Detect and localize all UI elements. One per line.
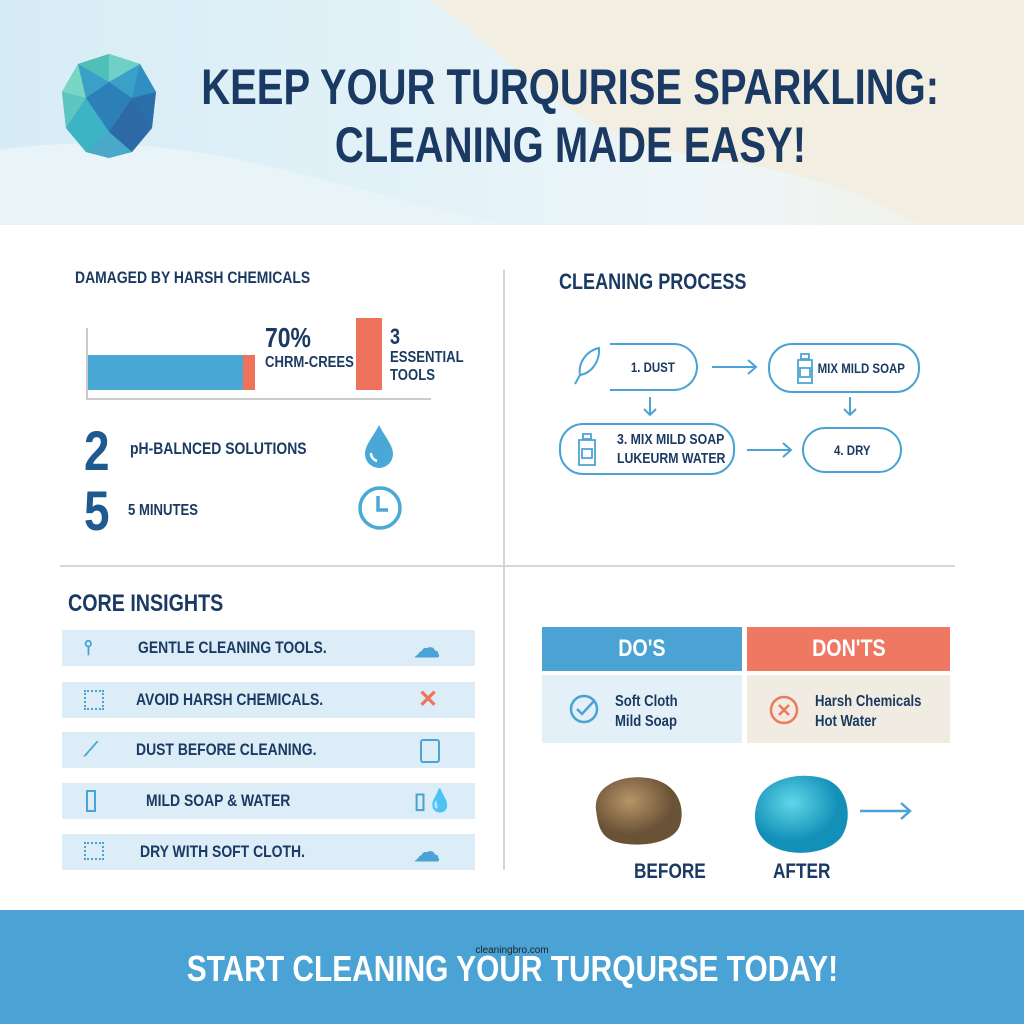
panel: do's and don'ts: DON'TS: [812, 635, 885, 662]
footer: START CLEANING YOUR TURQURSE TODAY!: [186, 948, 838, 989]
row 4: [62, 783, 475, 819]
text: 70%: 70%: [265, 322, 311, 353]
row 1: ⫯: [84, 637, 93, 659]
row 4: MILD SOAP & WATER: [146, 791, 290, 810]
title: KEEP YOUR TURQURISE SPARKLING:: [201, 59, 939, 115]
panel: do's and don'ts: Hot Water: [815, 713, 876, 730]
panel: stats: CHRM-CREES: [265, 354, 354, 371]
panel: stats: [75, 268, 464, 542]
row 5: [62, 834, 475, 870]
panel: do's and don'ts: Mild Soap: [615, 713, 677, 730]
panel: stats: pH-BALNCED SOLUTIONS: [130, 439, 307, 458]
step 1: [610, 343, 698, 391]
label: after: AFTER: [773, 860, 830, 883]
heading: CLEANING PROCESS: [559, 269, 746, 294]
icon: x: [770, 696, 798, 724]
icon: clock: [358, 486, 402, 530]
arrow: [712, 359, 758, 375]
panel: cleaning process: [559, 269, 920, 475]
icon: gem: [62, 54, 156, 158]
stat: 5: 5: [84, 479, 110, 542]
arrow: [747, 442, 792, 458]
row 1: ☁: [414, 633, 440, 663]
icon: check: [570, 694, 598, 724]
row 3: ⟋: [84, 739, 98, 761]
row 2: [62, 682, 475, 718]
heading: DAMAGED BY HARSH CHEMICALS: [75, 268, 310, 287]
row 5: ☁: [414, 837, 440, 867]
footer: cleaningbro.com: [475, 945, 549, 956]
row 1: [62, 630, 475, 666]
panel: do's and don'ts: Soft Cloth: [615, 693, 678, 710]
step 3: 3. MIX MILD SOAP: [617, 431, 724, 448]
header background: [0, 0, 1024, 225]
step 4: 4. DRY: [834, 442, 870, 458]
step 3: LUKEURM WATER: [617, 450, 725, 467]
stat: 2: 2: [84, 419, 110, 482]
row 1: GENTLE CLEANING TOOLS.: [138, 638, 327, 657]
title: CLEANING MADE EASY!: [334, 117, 806, 173]
icon: drop: [365, 425, 393, 468]
bar chart: [86, 328, 431, 400]
before stone: [596, 777, 682, 845]
step 2: MIX MILD SOAP: [817, 360, 905, 376]
label: before: BEFORE: [634, 860, 706, 883]
icon: feather: [574, 346, 600, 384]
step 3: [559, 423, 735, 475]
heading: core insights: CORE INSIGHTS: [68, 590, 223, 617]
row 3: DUST BEFORE CLEANING.: [136, 740, 316, 759]
text: 3 tools: ESSENTIAL: [390, 349, 464, 366]
panel: stats: 5 MINUTES: [128, 502, 198, 519]
title: [201, 59, 939, 173]
text: 3 tools: 3: [390, 324, 400, 349]
row 5: DRY WITH SOFT CLOTH.: [140, 842, 305, 861]
row 2: ✕: [418, 686, 438, 713]
row 2: AVOID HARSH CHEMICALS.: [136, 690, 323, 709]
row 3: [62, 732, 475, 768]
panel: do's and don'ts: Harsh Chemicals: [815, 693, 921, 710]
row 4: ▯💧: [414, 788, 454, 813]
panel: do's and don'ts: [542, 627, 950, 743]
step 1: 1. DUST: [631, 358, 675, 374]
after stone: [754, 776, 848, 853]
arrows down: [643, 397, 657, 416]
footer: [0, 910, 1024, 1024]
text: 3 tools: [390, 324, 464, 384]
step 2: [768, 343, 920, 393]
step 4: [802, 427, 902, 473]
panel: do's and don'ts: DO'S: [618, 635, 666, 662]
text: 3 tools: TOOLS: [390, 367, 435, 384]
arrow: [860, 802, 912, 820]
